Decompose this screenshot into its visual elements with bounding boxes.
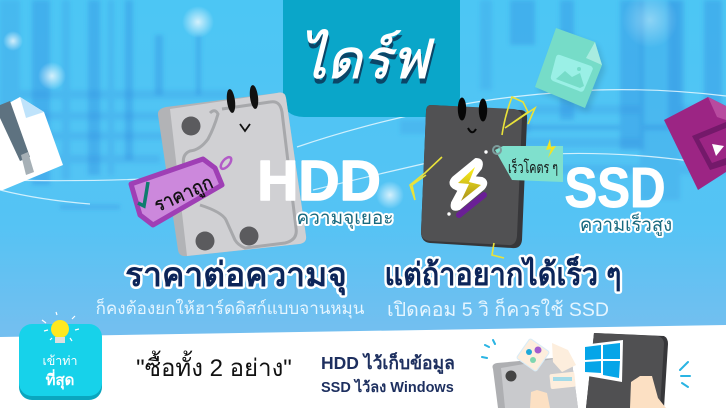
heading: price per capacity: ราคาต่อความจุ (125, 257, 347, 296)
illustration: both drives (482, 333, 690, 408)
SSD label: SSD (564, 156, 666, 220)
badge: best value: เข้าท่า (42, 354, 78, 368)
HDD illustration (158, 85, 306, 256)
subtext: left: ก็คงต้องยกให้ฮาร์ดดิสก์แบบจานหมุน (96, 297, 365, 319)
badge: best value (19, 312, 102, 400)
SSD illustration (421, 98, 527, 248)
HDD caption: ความจุเยอะ (297, 208, 393, 230)
icon: zip file (0, 97, 63, 190)
speed scribbles (410, 97, 535, 258)
icon: image file (535, 28, 605, 112)
quote: buy both: "ซื้อทั้ง 2 อย่าง" (136, 350, 292, 382)
hands (530, 376, 666, 408)
title: ไดร์ฟ (299, 29, 434, 90)
title: ไดร์ฟ (300, 34, 435, 95)
price tag: ราคาถูก (151, 172, 216, 217)
icon: windows logo (582, 340, 623, 382)
HDD label: HDD (257, 149, 381, 213)
icon: lightning bolt (447, 150, 488, 216)
heading: want speed: แต่ถ้าอยากได้เร็ว ๆ (384, 255, 622, 292)
badge: best value: ที่สุด (46, 369, 74, 390)
HDD face (226, 85, 259, 131)
text: usage line two: SSD ไว้ลง Windows (321, 378, 454, 396)
SSD caption: ความเร็วสูง (580, 212, 672, 236)
bottom panel (0, 325, 726, 408)
small SSD (586, 333, 668, 408)
icon: light bulb (42, 312, 79, 343)
small HDD (492, 357, 578, 408)
icon: video file (664, 97, 726, 190)
subtext: right: เปิดคอม 5 วิ ก็ควรใช้ SSD (387, 297, 609, 321)
motion marks (482, 340, 690, 387)
text: usage line one: HDD ไว้เก็บข้อมูล (321, 351, 455, 375)
SSD face (458, 98, 487, 132)
price tag (131, 155, 233, 225)
speed tag: เร็วโคตร ๆ (508, 157, 558, 177)
title panel (283, 0, 460, 117)
speed tag (493, 139, 563, 182)
icon: floating files (516, 338, 576, 389)
